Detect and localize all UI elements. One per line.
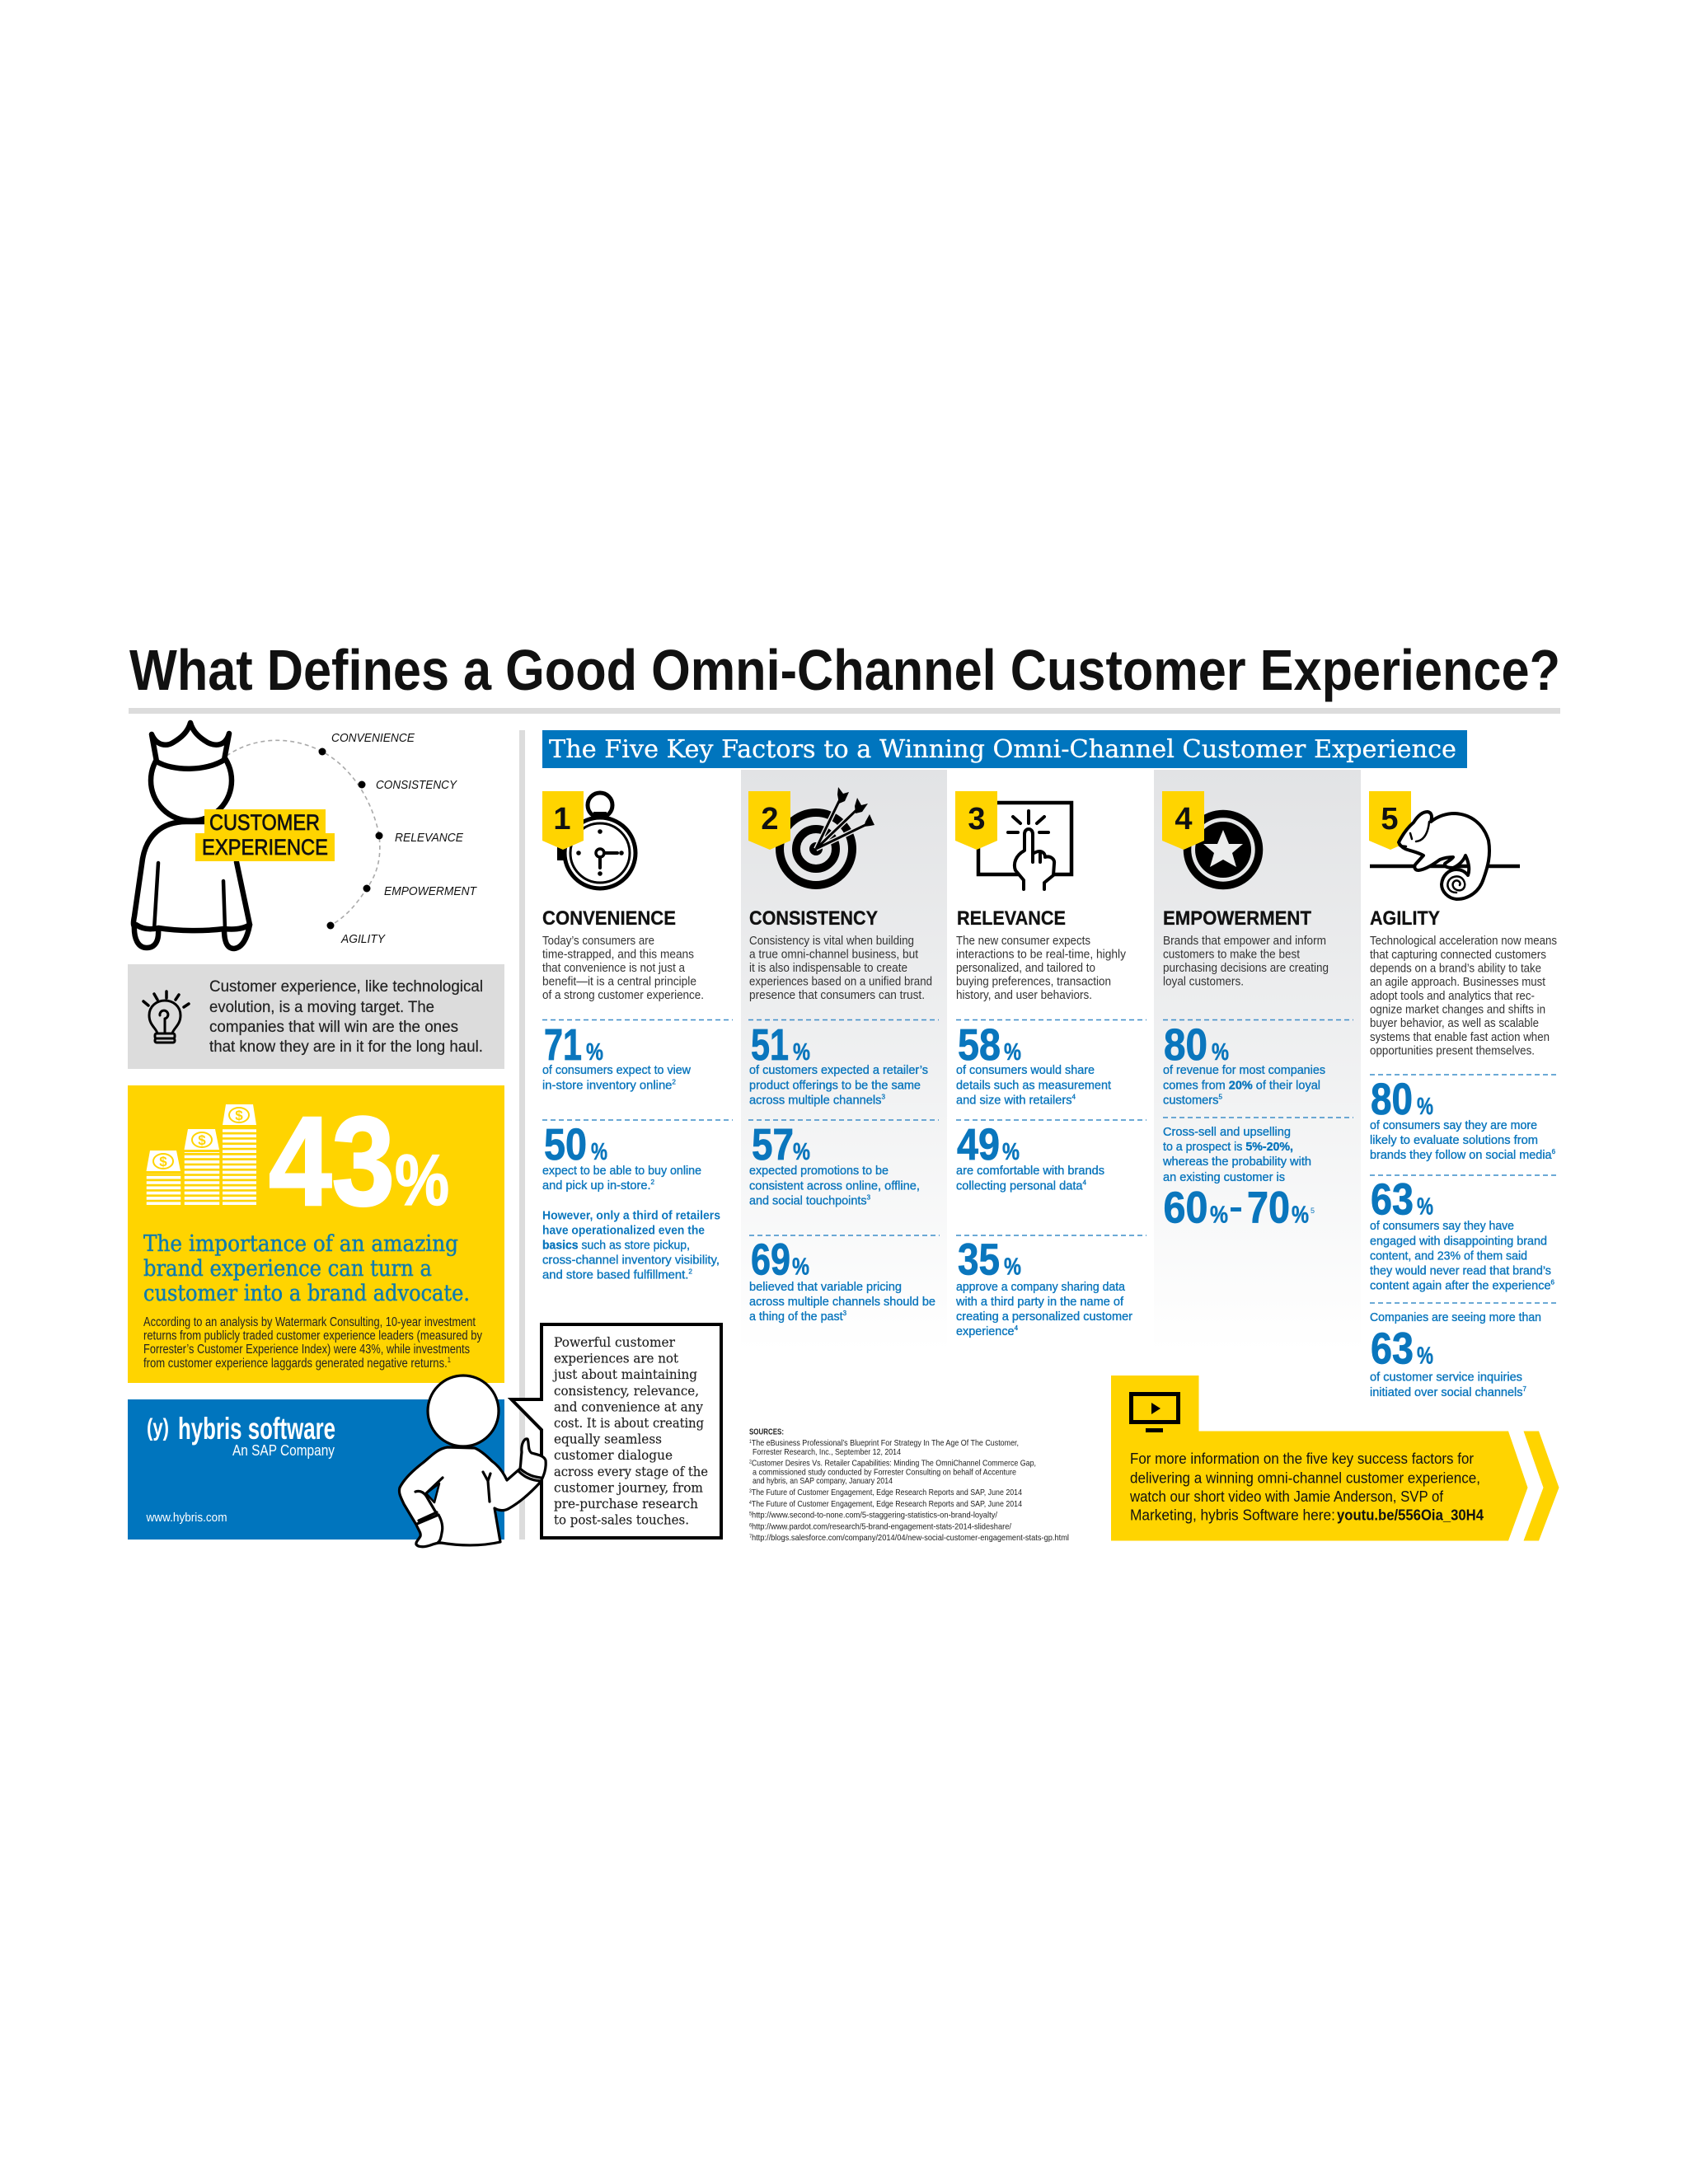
stat: 63% brand content: 63: [1371, 1175, 1414, 1225]
illustration: customer with crown and factor arc: EMPOWERMENT: [384, 884, 478, 898]
stat: 63% brand content: %: [1417, 1193, 1433, 1220]
sources list: The Future of Customer Engagement, Edge Research Reports and SAP, June 2014: [752, 1499, 1022, 1509]
stat: 35%: 4: [1015, 1324, 1019, 1332]
stat: 50%: 50: [544, 1120, 587, 1169]
stat: cross-sell 60%-70%: [1162, 1126, 1315, 1233]
column backgrounds: [741, 770, 1361, 1352]
sources list: http://blogs.salesforce.com/company/2014/04/new-social-customer-engagement-stats-gp.html: [752, 1533, 1069, 1543]
stat: 63% brand content: they would never read that brand’s: [1370, 1264, 1551, 1277]
text block: convenience intro: of a strong customer experience.: [542, 989, 704, 1002]
sources list: 3: [749, 1489, 752, 1494]
text block: agility intro: [1370, 935, 1557, 1058]
sources list: 7: [749, 1535, 753, 1540]
callout: powerful customer experiences: pre-purchase research: [554, 1497, 698, 1511]
stat: 51%: product offerings to be the same: [749, 1080, 921, 1093]
text block: convenience intro: benefit—it is a central principle: [542, 976, 696, 989]
icon: light bulb: [143, 991, 189, 1043]
illustration: customer with crown and factor arc: RELEVANCE: [395, 831, 464, 845]
text block: consistency intro: [749, 935, 932, 1002]
stat: 80% social media: 80: [1371, 1075, 1413, 1124]
stat: 69%: 3: [843, 1310, 847, 1317]
text block: empowerment intro: customers to make the best: [1163, 948, 1300, 961]
stat: 80% revenue: %: [1212, 1039, 1229, 1066]
text block: agility intro: systems that enable fast action when: [1370, 1031, 1550, 1044]
stat: 80% social media: [1370, 1075, 1556, 1162]
panel: hybris logo: [128, 1399, 504, 1540]
stat: 58%: %: [1004, 1039, 1021, 1066]
stat: 49%: 49: [957, 1120, 1000, 1169]
callout: powerful customer experiences: and convenience at any: [554, 1399, 703, 1414]
stat: 35%: experience: [956, 1325, 1015, 1338]
stat: 80% social media: likely to evaluate solutions from: [1370, 1134, 1538, 1147]
callout: powerful customer experiences: customer dialogue: [554, 1448, 673, 1463]
text block: Watermark analysis: from customer experience laggards generated negative returns.: [143, 1357, 504, 1371]
stat: 50%: and pick up in-store.: [542, 1179, 650, 1193]
stat: 63% brand content: engaged with disappointing brand: [1370, 1235, 1547, 1248]
sources list: Customer Desires Vs. Retailer Capabilities: Minding The OmniChannel Commerce Gap,: [752, 1459, 1036, 1469]
stat: 63% social service: of customer service inquiries: [1370, 1371, 1522, 1385]
text block: video info: For more information on the five key success factors for: [1130, 1451, 1474, 1467]
stat: 50%: 2: [651, 1179, 655, 1186]
sources list: The Future of Customer Engagement, Edge Research Reports and SAP, June 2014: [752, 1488, 1022, 1497]
stat: 58%: [956, 1020, 1111, 1108]
text block: note: Customer experience, like technological: [209, 977, 483, 996]
text block: relevance intro: buying preferences, transaction: [956, 976, 1111, 989]
stat: 80% social media: %: [1417, 1094, 1433, 1120]
callout: powerful customer experiences: [511, 1324, 721, 1538]
text block: relevance intro: The new consumer expects: [956, 935, 1090, 948]
stat: 35%: with a third party in the name of: [955, 1296, 1124, 1309]
stat: 63% brand content: of consumers say they have: [1370, 1220, 1514, 1233]
stat: 57%: 3: [867, 1193, 871, 1202]
stat: 63% brand content: [1370, 1175, 1555, 1292]
logo: hybris software: An SAP Company: [232, 1442, 335, 1459]
heading banner: five key factors: The Five Key Factors to a Winning Omni-Channel Customer Experience: [549, 735, 1456, 764]
stat: 58%: 4: [1072, 1093, 1076, 1101]
text block: relevance intro: history, and user behaviors.: [956, 989, 1092, 1002]
stat: cross-sell 60%-70%: to a prospect is 5%-20%,: [1163, 1141, 1293, 1154]
badge 4: [1162, 791, 1204, 850]
sources list: 6: [749, 1523, 753, 1528]
badge 3: [955, 791, 997, 850]
stat: 35%: creating a personalized customer: [956, 1310, 1132, 1324]
icon: target with arrows: [780, 787, 874, 885]
logo: hybris software: hybris software: [178, 1412, 335, 1446]
stat: 80% revenue: 5: [1219, 1093, 1223, 1101]
stat: 35%: approve a company sharing data: [956, 1281, 1126, 1294]
stat: cross-sell 60%-70%: an existing customer is: [1163, 1171, 1285, 1184]
stat: 51%: of customers expected a retailer’s: [749, 1064, 928, 1077]
stat: 49%: collecting personal data: [956, 1180, 1081, 1193]
text block: note: [209, 977, 483, 1056]
text block: Watermark analysis: Forrester’s Customer Experience Index) were 43%, while investments: [143, 1343, 470, 1357]
sources list: a commissioned study conducted by Forrester Consulting on behalf of Accenture: [753, 1467, 1016, 1477]
big number 43%: 43: [269, 1090, 395, 1232]
stat: 51%: 3: [881, 1093, 886, 1101]
text block: convenience intro: [542, 935, 704, 1002]
callout: powerful customer experiences: experiences are not: [554, 1352, 679, 1366]
callout: powerful customer experiences: across every stage of the: [554, 1465, 708, 1479]
text block: agility intro: adopt tools and analytics that rec-: [1370, 990, 1535, 1003]
stat: 51%: [749, 1020, 928, 1108]
stat: 58%: and size with retailers: [956, 1094, 1071, 1108]
heading: consistency: CONSISTENCY: [749, 907, 878, 930]
stat: cross-sell 60%-70%: Cross-sell and upselling: [1163, 1126, 1291, 1139]
heading: brand advocate: [143, 1231, 470, 1306]
stat: 57%: %: [793, 1139, 810, 1165]
stat: 57%: [749, 1120, 920, 1208]
stat: 35%: 35: [958, 1235, 1000, 1284]
stat: 80% revenue: comes from 20% of their loyal: [1163, 1080, 1320, 1093]
heading: brand advocate: brand experience can turn a: [143, 1256, 432, 1282]
stat: 51%: %: [793, 1039, 810, 1066]
column 1: convenience: [542, 791, 733, 1282]
text block: empowerment intro: Brands that empower and inform: [1163, 935, 1326, 948]
badge 1: [542, 791, 584, 850]
sources list: and hybris, an SAP company, January 2014: [753, 1476, 893, 1486]
icon: money stacks: $: [159, 1154, 167, 1169]
text block: third of retailers: have operationalized even the: [542, 1225, 705, 1238]
column 5: agility: [1369, 791, 1559, 1399]
stat: 49%: [956, 1120, 1104, 1193]
illustration: customer with crown and factor arc: CONSISTENCY: [376, 778, 457, 792]
badge 1: 1: [553, 802, 571, 837]
stat: 69%: %: [792, 1254, 809, 1281]
callout: powerful customer experiences: equally seamless: [554, 1432, 662, 1447]
illustration: customer with crown and factor arc: [134, 723, 478, 949]
stat: 63% social service: [1370, 1311, 1541, 1399]
text block: consistency intro: a true omni-channel business, but: [749, 948, 918, 961]
text block: third of retailers: 2: [688, 1268, 693, 1276]
stat: 69%: [749, 1235, 935, 1324]
stat: 63% brand content: content, and 23% of them said: [1370, 1249, 1527, 1263]
stat: 63% social service: %: [1417, 1343, 1433, 1370]
text block: relevance intro: interactions to be real-time, highly: [956, 948, 1127, 961]
stat: 57%: consistent across online, offline,: [749, 1180, 920, 1193]
callout: powerful customer experiences: consistency, relevance,: [554, 1384, 699, 1399]
stat: 49%: are comfortable with brands: [956, 1165, 1104, 1178]
stat: 69%: believed that variable pricing: [749, 1281, 902, 1294]
stat: 50%: expect to be able to buy online: [542, 1165, 701, 1178]
column 4: empowerment: [1162, 791, 1353, 1233]
stat: 63% social service: initiated over social channels: [1370, 1386, 1522, 1399]
icon: video screen: [1131, 1394, 1179, 1432]
text block: consistency intro: presence that consumers can trust.: [749, 989, 925, 1002]
text block: convenience intro: time-strapped, and this means: [542, 948, 694, 961]
stat: cross-sell 60%-70%: whereas the probability with: [1162, 1155, 1311, 1169]
icon: touch screen hand: [978, 803, 1071, 889]
stat: 71%: 71: [544, 1020, 582, 1070]
stat: 80% revenue: of revenue for most companies: [1163, 1064, 1325, 1077]
callout: powerful customer experiences: Powerful customer: [554, 1335, 676, 1350]
stat: 71%: in-store inventory online: [542, 1080, 669, 1093]
stat: 69%: 69: [751, 1235, 790, 1284]
call to action: video arrow: [1111, 1376, 1559, 1541]
text block: agility intro: depends on a brand’s ability to take: [1370, 963, 1541, 976]
badge 4: 4: [1175, 802, 1193, 837]
column 3: relevance: [955, 791, 1146, 1338]
text block: empowerment intro: [1163, 935, 1329, 989]
stat: cross-sell 60%-70%: 70: [1247, 1183, 1290, 1233]
icon: star badge: [1187, 814, 1259, 885]
stat: 80% revenue: [1163, 1020, 1325, 1108]
text block: third of retailers: basics such as store pickup,: [542, 1240, 690, 1253]
stat: 71%: %: [586, 1039, 603, 1066]
text block: empowerment intro: purchasing decisions are creating: [1163, 962, 1329, 975]
illustration: person giving thumbs up: [399, 1376, 546, 1547]
sources list: Forrester Research, Inc., September 12, 2014: [753, 1447, 901, 1457]
illustration: customer with crown and factor arc: CONVENIENCE: [331, 731, 415, 745]
logo: hybris software: [147, 1412, 335, 1459]
stat: 80% revenue: customers: [1163, 1094, 1218, 1108]
heading: relevance: RELEVANCE: [957, 907, 1066, 930]
stat: cross-sell 60%-70%: 5: [1311, 1207, 1315, 1215]
stat: cross-sell 60%-70%: 60: [1164, 1183, 1208, 1233]
stat: 57%: 57: [752, 1120, 794, 1169]
heading: empowerment: EMPOWERMENT: [1163, 907, 1311, 930]
column 2: consistency: [748, 787, 940, 1324]
stat: 80% social media: 6: [1552, 1148, 1556, 1155]
sources list: The eBusiness Professional’s Blueprint For Strategy In The Age Of The Customer,: [752, 1438, 1019, 1448]
callout: powerful customer experiences: cost. It is about creating: [554, 1416, 704, 1431]
text block: agility intro: an agile approach. Businesses must: [1370, 976, 1545, 989]
stat: 63% social service: 63: [1371, 1324, 1414, 1373]
stat: 58%: of consumers would share: [956, 1064, 1095, 1077]
stat: 80% social media: of consumers say they are more: [1370, 1119, 1537, 1132]
text block: video info: youtu.be/556Oia_30H4: [1337, 1507, 1484, 1523]
illustration: customer with crown and factor arc: CUSTOMER: [209, 810, 320, 835]
text block: video info: delivering a winning omni-channel customer experience,: [1130, 1470, 1480, 1487]
text block: empowerment intro: loyal customers.: [1163, 976, 1244, 989]
stat: 50%: [542, 1120, 701, 1193]
url: www.hybris.com: [146, 1511, 227, 1525]
text block: video info: Marketing, hybris Software here:: [1130, 1507, 1335, 1523]
stat: 80% social media: brands they follow on social media: [1370, 1149, 1553, 1162]
big number 43%: %: [395, 1141, 449, 1221]
badge 3: 3: [968, 802, 986, 837]
text block: relevance intro: personalized, and tailored to: [956, 962, 1095, 975]
text block: Watermark analysis: [143, 1315, 482, 1371]
stat: 63% brand content: 6: [1551, 1279, 1555, 1286]
sources list: 1: [749, 1440, 752, 1445]
stat: 57%: and social touchpoints: [749, 1195, 867, 1208]
stat: 50%: %: [591, 1139, 607, 1165]
stat: cross-sell 60%-70%: %: [1210, 1202, 1228, 1228]
panel: moving target note: [128, 964, 504, 1069]
sources list: [749, 1427, 1069, 1543]
stat: 51%: across multiple channels: [749, 1094, 880, 1108]
stat: 57%: expected promotions to be: [749, 1165, 889, 1178]
icon: chameleon on a branch: [1370, 812, 1520, 899]
stat: 49%: 4: [1083, 1179, 1087, 1187]
illustration: customer with crown and factor arc: AGILITY: [340, 932, 386, 946]
sources list: 5: [749, 1511, 753, 1516]
stat: 71%: of consumers expect to view: [542, 1064, 692, 1077]
stat: cross-sell 60%-70%: %: [1292, 1202, 1309, 1228]
stat: 71%: [542, 1020, 692, 1093]
stat: 58%: details such as measurement: [956, 1080, 1111, 1093]
text block: video info: watch our short video with Jamie Anderson, SVP of: [1129, 1488, 1444, 1505]
illustration: customer with crown and factor arc: EXPERIENCE: [202, 835, 328, 860]
stat: 63% social service: Companies are seeing more than: [1370, 1311, 1541, 1324]
stat: 71%: 2: [672, 1078, 677, 1086]
text block: agility intro: that capturing connected customers: [1370, 949, 1546, 962]
badge 5: [1369, 791, 1411, 850]
text block: third of retailers: cross-channel inventory visibility,: [542, 1254, 720, 1268]
stat: 51%: 51: [751, 1020, 789, 1070]
text block: note: companies that will win are the ones: [209, 1018, 458, 1036]
text block: consistency intro: Consistency is vital when building: [749, 935, 914, 948]
badge 2: 2: [761, 802, 779, 837]
icon: money stacks: [147, 1104, 256, 1205]
badge 5: 5: [1381, 802, 1399, 837]
text block: agility intro: buyer behavior, as well as scalable: [1370, 1017, 1539, 1030]
text block: convenience intro: Today’s consumers are: [542, 935, 654, 948]
stat: 35%: [955, 1235, 1132, 1338]
callout: powerful customer experiences: to post-sales touches.: [554, 1513, 689, 1528]
panel: 43% brand experience: [128, 1085, 504, 1383]
text block: convenience intro: that convenience is not just a: [542, 962, 686, 975]
text block: consistency intro: experiences based on a unified brand: [749, 976, 932, 989]
text block: note: that know they are in it for the long haul.: [209, 1038, 483, 1056]
text block: agility intro: ognize market changes and shifts in: [1370, 1004, 1545, 1017]
text block: third of retailers: [542, 1210, 720, 1282]
stat: 35%: %: [1004, 1254, 1021, 1281]
sources list: 4: [749, 1501, 752, 1506]
sources list: SOURCES:: [749, 1427, 784, 1437]
stat: 49%: %: [1002, 1139, 1020, 1165]
icon: money stacks: $: [198, 1132, 206, 1148]
icon: money stacks: $: [235, 1108, 243, 1123]
text block: Watermark analysis: According to an analysis by Watermark Consulting, 10-year investment: [143, 1315, 476, 1329]
callout: powerful customer experiences: just about maintaining: [552, 1367, 697, 1382]
icon: stopwatch: [557, 793, 635, 888]
heading: brand advocate: customer into a brand advocate.: [143, 1281, 470, 1306]
text block: third of retailers: and store based fulfillment.: [542, 1269, 685, 1282]
stat: 69%: a thing of the past: [749, 1310, 844, 1324]
text block: relevance intro: [956, 935, 1127, 1002]
text block: video info: [1129, 1451, 1484, 1523]
callout: powerful customer experiences: customer journey, from: [554, 1480, 703, 1495]
sources list: http://www.second-to-none.com/5-staggering-statistics-on-brand-loyalty/: [752, 1510, 997, 1520]
logo: hybris software: (y): [147, 1414, 169, 1441]
stat: 63% social service: 7: [1523, 1385, 1527, 1393]
stat: 63% brand content: content again after the experience: [1370, 1279, 1550, 1292]
text block: third of retailers: However, only a third of retailers: [542, 1210, 720, 1223]
text block: agility intro: opportunities present themselves.: [1370, 1045, 1535, 1058]
sources list: http://www.pardot.com/research/5-brand-engagement-stats-2014-slideshare/: [752, 1521, 1011, 1531]
heading: convenience: CONVENIENCE: [542, 907, 676, 930]
heading: agility: AGILITY: [1370, 907, 1440, 930]
sources list: 2: [749, 1460, 752, 1465]
text block: note: evolution, is a moving target. The: [209, 998, 434, 1016]
text block: Watermark analysis: returns from publicly traded customer experience leaders (measured by: [143, 1329, 482, 1343]
stat: 69%: across multiple channels should be: [749, 1296, 935, 1309]
text block: agility intro: Technological acceleration now means: [1370, 935, 1557, 948]
badge 2: [748, 791, 790, 850]
text block: Watermark analysis: 1: [448, 1356, 451, 1364]
text block: consistency intro: it is also indispensable to create: [749, 962, 907, 975]
stat: 58%: 58: [958, 1020, 1001, 1070]
stat: 80% revenue: 80: [1164, 1020, 1207, 1070]
heading: brand advocate: The importance of an amazing: [143, 1231, 458, 1257]
